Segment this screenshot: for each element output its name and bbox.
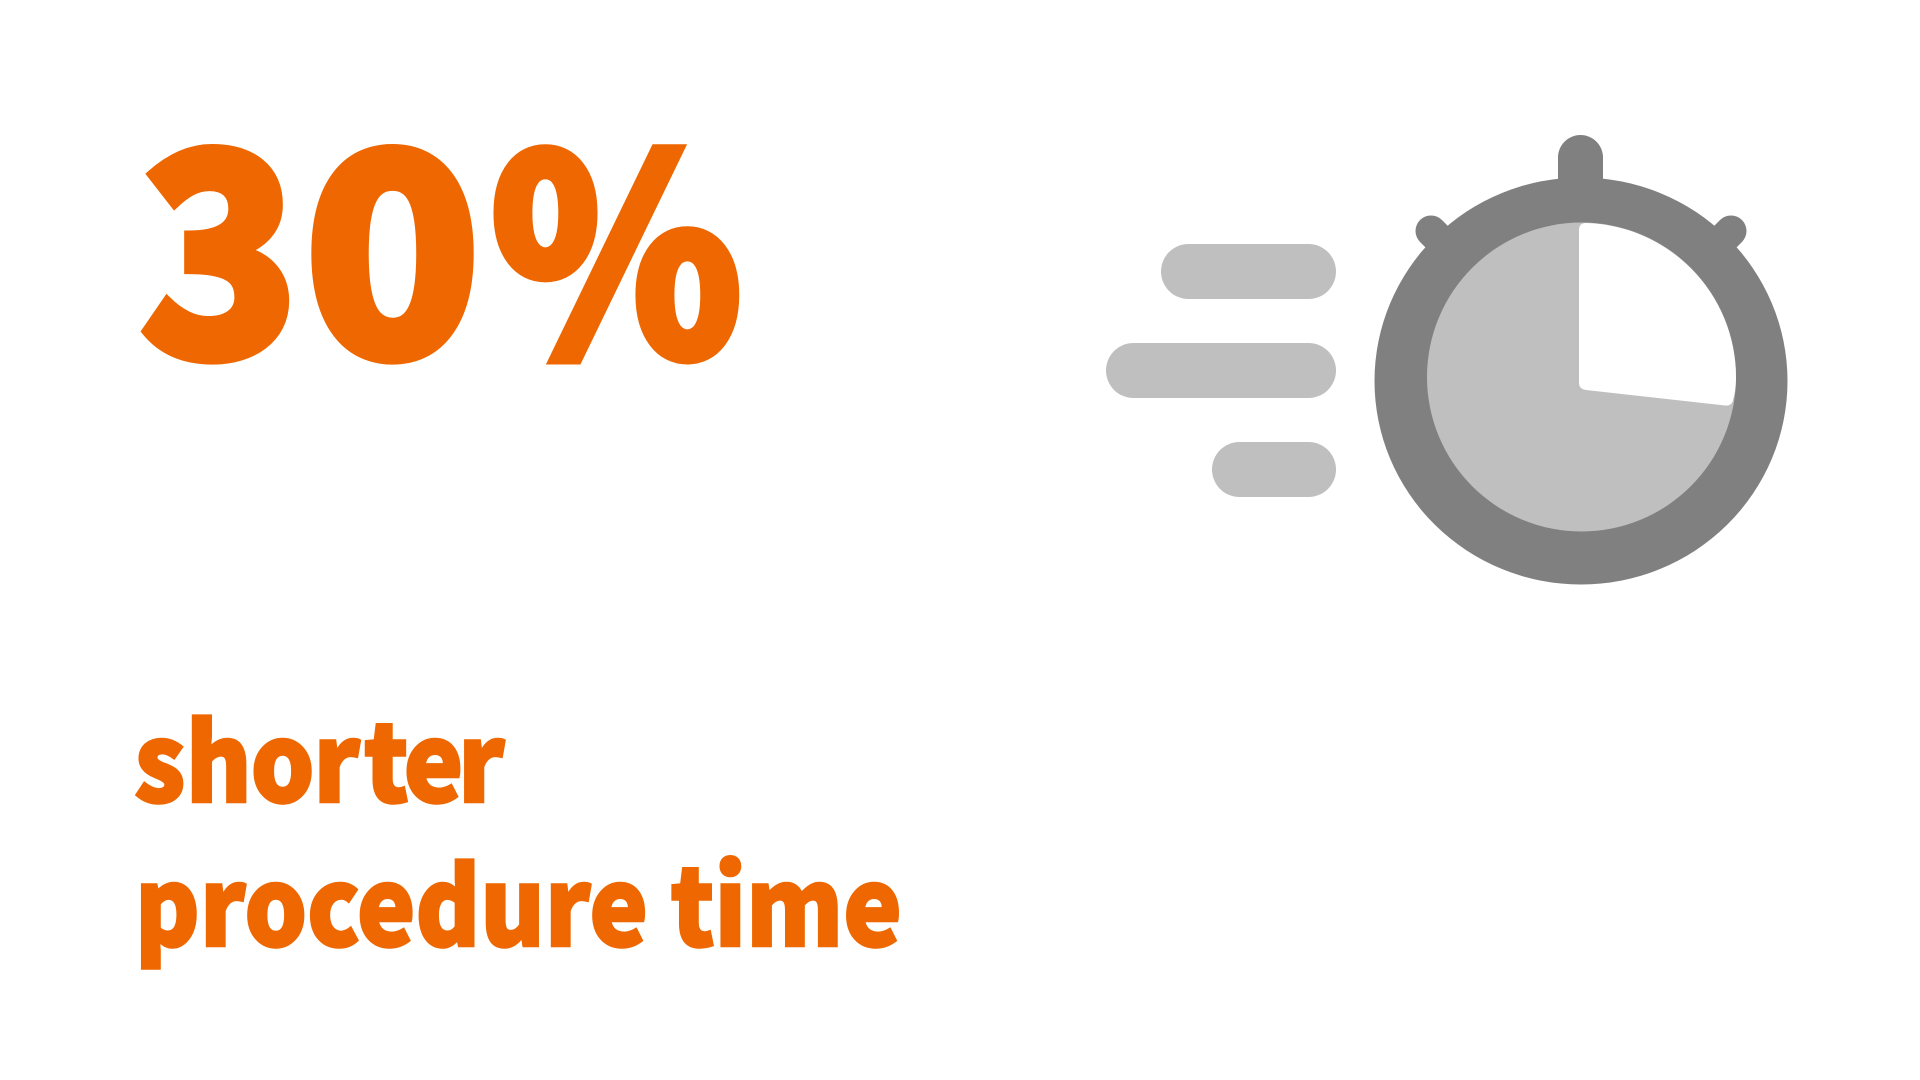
icon: speed lines — [1106, 244, 1336, 497]
big statistic: 30%: 3 — [139, 31, 300, 439]
caption line 2: procedure time: procedure time — [135, 822, 902, 978]
stopwatch right button — [1710, 231, 1731, 252]
speed line bottom — [1212, 442, 1336, 497]
speed line top — [1161, 244, 1336, 299]
stopwatch left button — [1431, 231, 1452, 252]
big statistic: 30% — [139, 31, 743, 439]
caption line 1: shorter: shorter — [134, 678, 505, 834]
stopwatch dial — [1427, 222, 1736, 532]
stopwatch outer ring — [1374, 178, 1788, 584]
big statistic: 30%: 0 — [304, 31, 482, 439]
big statistic: 30%: % — [490, 39, 743, 437]
icon: stopwatch — [1374, 135, 1788, 584]
caption text — [134, 678, 902, 978]
speed line middle — [1106, 343, 1336, 398]
stopwatch elapsed wedge — [1579, 223, 1736, 406]
stopwatch top button — [1558, 135, 1603, 190]
